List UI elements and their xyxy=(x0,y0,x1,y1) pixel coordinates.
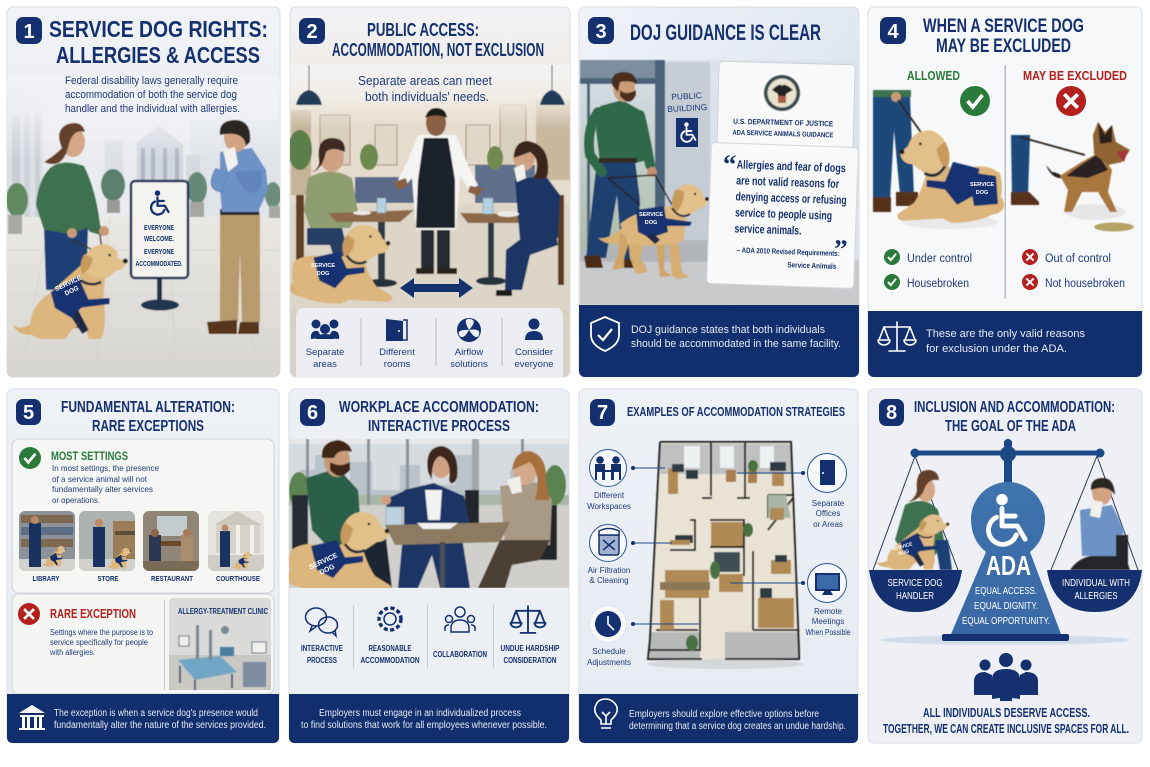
figure: handler with dog xyxy=(876,470,952,570)
list: allowed criteria xyxy=(884,249,972,290)
badge: number 1 xyxy=(16,17,42,44)
text block: separate areas xyxy=(358,73,492,104)
footer band xyxy=(579,694,858,743)
icon: group of people xyxy=(311,320,339,339)
labels: process elements: UNDUE HARDSHIP xyxy=(500,644,560,653)
text block: rare exception description xyxy=(49,628,153,657)
callout: remote meetings: When Possible xyxy=(806,628,851,637)
labels: options: solutions xyxy=(450,359,488,370)
vest label: SERVICE xyxy=(308,552,339,571)
icon: justice department seal xyxy=(764,75,800,111)
sign: everyone welcome: ACCOMMODATED. xyxy=(136,259,182,268)
badge: number 4: 4 xyxy=(887,21,899,43)
heading: panel 2 title xyxy=(332,20,544,60)
badge: number 4 xyxy=(880,17,906,44)
card: ADA quote: are not valid reasons for xyxy=(736,173,840,191)
footer band xyxy=(289,694,569,743)
sign: accessible public building: PUBLIC xyxy=(671,90,702,102)
pan: individual with allergies: INDIVIDUAL WITH xyxy=(1062,578,1130,589)
panel: 1 service dog rights xyxy=(6,7,281,377)
labels: options: everyone xyxy=(514,359,554,370)
illustration: allergy treatment clinic: ALLERGY-TREATMENT CLINIC xyxy=(178,607,268,616)
text: ADA equal access xyxy=(962,550,1050,627)
thumbnail: library xyxy=(19,511,75,571)
heading: panel 1 title xyxy=(49,16,268,68)
footer band: to find solutions that work for all employees whenever possible. xyxy=(301,720,547,731)
icon: group of people xyxy=(974,653,1038,701)
heading: panel 4 title: WHEN A SERVICE DOG xyxy=(923,16,1084,37)
card: rare exception: RARE EXCEPTION xyxy=(50,607,136,621)
badge: number 8 xyxy=(879,399,904,426)
man xyxy=(306,470,360,546)
icon: gear xyxy=(379,608,401,630)
labels: process elements: CONSIDERATION xyxy=(504,656,557,665)
text block: separate areas: Separate areas can meet xyxy=(358,73,492,88)
badge: number 2: 2 xyxy=(306,21,318,43)
footer band: The exception is when a service dog's presence would xyxy=(54,708,258,719)
labels: options: Different xyxy=(379,347,415,358)
panel: 3 DOJ guidance xyxy=(579,7,859,377)
labels: settings xyxy=(32,574,260,583)
icon: check xyxy=(960,86,990,116)
vest label: DOG xyxy=(645,220,657,226)
list: exclusion criteria: Out of control xyxy=(1045,253,1111,265)
illustration: man and service dog at public building xyxy=(579,60,859,377)
callout: schedule adjustments: Adjustments xyxy=(587,658,631,667)
icon: scales xyxy=(511,606,545,633)
pan: service dog handler: SERVICE DOG xyxy=(888,578,943,589)
pan: individual with allergies: ALLERGIES xyxy=(1074,591,1118,602)
card: ADA quote: Service Animals xyxy=(787,260,836,271)
footer band: Employers should explore effective options before xyxy=(629,709,819,720)
icon: airflow fan xyxy=(457,318,481,342)
vest label: service dog xyxy=(311,263,335,277)
illustration: lobby with handler, dog, sign and person with allergies xyxy=(6,75,281,377)
card: most settings: MOST SETTINGS xyxy=(51,451,128,463)
illustration: allergy treatment clinic xyxy=(169,598,271,690)
illustration: leg and out of control dog xyxy=(1011,122,1134,232)
column: allowed: SERVICE xyxy=(970,182,994,188)
labels: process elements: INTERACTIVE xyxy=(301,644,343,653)
vest label xyxy=(308,552,343,580)
callout: schedule adjustments: Schedule xyxy=(592,647,626,656)
callout: schedule adjustments xyxy=(587,606,700,667)
badge: number 6 xyxy=(300,399,325,426)
callout: remote meetings: Meetings xyxy=(812,617,844,626)
badge: number 7 xyxy=(590,399,615,426)
text block: most settings description: of a service animal will not xyxy=(52,475,148,484)
labels: process elements: REASONABLE xyxy=(368,644,412,653)
vest label: DOG xyxy=(319,563,337,577)
floor plan: open office xyxy=(647,442,803,669)
badge: number 8: 8 xyxy=(886,402,897,424)
callout: remote meetings: Remote xyxy=(814,607,843,616)
panel: 6 workplace accommodation xyxy=(287,389,569,743)
footer band xyxy=(7,694,279,743)
card: ADA quote: service to people using xyxy=(735,205,832,223)
text block: federal disability laws: handler and the individual with allergies. xyxy=(65,103,240,115)
text block: federal disability laws: Federal disability laws generally require xyxy=(65,75,238,87)
badge: number 5 xyxy=(16,399,41,425)
thumbnail: courthouse xyxy=(208,511,266,571)
column: may be excluded: MAY BE EXCLUDED xyxy=(1023,68,1127,83)
badge: number 2 xyxy=(299,18,325,44)
icon: x mark xyxy=(18,603,40,625)
heading: panel 5 title: RARE EXCEPTIONS xyxy=(92,418,204,435)
footer band: should be accommodated in the same facility. xyxy=(631,338,841,350)
icon: courthouse xyxy=(19,705,45,730)
card: ADA quote: denying access or refusing xyxy=(735,189,847,207)
column: allowed: DOG xyxy=(976,190,988,196)
card: rare exception xyxy=(12,594,274,694)
keyhole pillar xyxy=(951,482,1061,634)
sign: everyone welcome: WELCOME. xyxy=(144,234,174,243)
labels: process elements: COLLABORATION xyxy=(433,650,487,659)
text: ADA equal access: EQUAL DIGNITY. xyxy=(974,601,1038,612)
heading: panel 8 title xyxy=(914,399,1115,435)
figure: person with allergies xyxy=(1070,478,1130,570)
callout: different workspaces: Workspaces xyxy=(587,502,631,511)
column: allowed: ALLOWED xyxy=(907,68,960,83)
callout: separate offices: Offices xyxy=(816,509,840,518)
chart: balance scale with ADA keyhole xyxy=(869,439,1142,645)
callout: separate offices xyxy=(737,454,846,529)
arrow: separation between tables xyxy=(400,278,473,298)
column: allowed xyxy=(873,68,1004,290)
standing service dog xyxy=(598,228,625,244)
thumbnail: store xyxy=(79,511,137,571)
server xyxy=(421,228,434,268)
badge: number 3: 3 xyxy=(595,21,607,43)
heading: panel 6 title: WORKPLACE ACCOMMODATION: xyxy=(339,399,539,416)
column: may be excluded xyxy=(1011,68,1134,290)
list: exclusion criteria xyxy=(1022,249,1125,290)
card: ADA quote: Allergies and fear of dogs xyxy=(737,157,846,175)
text: ADA equal access: EQUAL ACCESS. xyxy=(975,586,1037,597)
sign: accessible public building: BUILDING xyxy=(667,102,708,114)
heading: panel 4 title: MAY BE EXCLUDED xyxy=(936,36,1071,57)
footer band: DOJ guidance states that both individuals xyxy=(631,324,825,336)
icon: light bulb xyxy=(595,699,617,728)
right table and woman xyxy=(460,213,533,223)
list: allowed criteria: Housebroken xyxy=(907,278,969,290)
badge: number 5: 5 xyxy=(23,402,34,424)
text: ADA equal access: EQUAL OPPORTUNITY. xyxy=(962,616,1050,627)
pan: service dog handler: HANDLER xyxy=(896,591,934,602)
panel: 4 when a service dog may be excluded xyxy=(868,7,1142,377)
heading: panel 6 title: INTERACTIVE PROCESS xyxy=(368,418,510,435)
vest label: service dog: SERVICE xyxy=(311,263,335,269)
card: ADA quote: – ADA 2010 Revised Requirements: xyxy=(737,245,840,258)
callout: air filtration: & Cleaning xyxy=(589,576,629,585)
vest label: SERVICE xyxy=(891,541,914,553)
icon: person xyxy=(525,318,543,340)
vest label xyxy=(639,212,663,226)
labels: process elements: PROCESS xyxy=(307,656,337,665)
text: ADA equal access: ADA xyxy=(986,550,1031,581)
callout: air filtration xyxy=(588,524,672,585)
vest label: service dog: DOG xyxy=(64,285,80,297)
footer band: Employers must engage in an individualized process xyxy=(319,708,521,719)
icon: check xyxy=(19,447,41,469)
text: closing statement xyxy=(883,706,1129,736)
labels: options xyxy=(306,347,554,370)
labels: settings: STORE xyxy=(98,574,118,583)
text block: rare exception description: Settings where the purpose is to xyxy=(50,628,153,637)
labels: options: areas xyxy=(313,359,337,370)
vest label: service dog: SERVICE xyxy=(54,274,83,293)
callout: different workspaces xyxy=(587,450,665,511)
footer band: These are the only valid reasons xyxy=(926,328,1085,340)
footer band: for exclusion under the ADA. xyxy=(926,343,1067,355)
pan: service dog handler xyxy=(869,570,962,612)
text block: separate areas: both individuals' needs. xyxy=(365,89,489,104)
heading: panel 7 title: EXAMPLES OF ACCOMMODATION STRATEGIES xyxy=(627,404,845,419)
labels: process elements: ACCOMMODATION xyxy=(360,656,420,665)
heading: panel 1 title: ALLERGIES & ACCESS xyxy=(56,42,260,68)
text block: rare exception description: with allergies. xyxy=(49,648,95,657)
manager xyxy=(404,483,470,525)
footer band xyxy=(868,311,1142,377)
callout: separate offices: Separate xyxy=(812,499,845,508)
illustration: handler legs and calm dog xyxy=(873,90,1004,229)
panel: 7 examples of accommodation strategies xyxy=(579,389,858,743)
man xyxy=(586,160,640,260)
callout: different workspaces: Different xyxy=(594,491,625,500)
callout: separate offices: or Areas xyxy=(813,520,843,529)
vest label: DOG xyxy=(898,549,910,557)
list: allowed criteria: Under control xyxy=(907,253,972,265)
callout: air filtration: Air Filtration xyxy=(588,566,630,575)
woman handler xyxy=(44,227,89,291)
card: DOJ guidance header with seal: U.S. DEPARTMENT OF JUSTICE xyxy=(733,117,833,128)
icon: shield check xyxy=(591,317,619,351)
vest label: service dog: DOG xyxy=(317,271,329,277)
sign: accessible public building xyxy=(666,90,708,147)
text block: most settings description: fundamentally alter services xyxy=(52,485,153,494)
labels: settings: COURTHOUSE xyxy=(216,574,260,583)
heading: panel 1 title: SERVICE DOG RIGHTS: xyxy=(49,16,268,42)
icon: door xyxy=(386,319,407,341)
left table and woman xyxy=(306,227,346,258)
heading: panel 5 title: FUNDAMENTAL ALTERATION: xyxy=(61,399,235,416)
text block: federal disability laws xyxy=(65,75,240,115)
vest label xyxy=(891,541,915,559)
footer band: fundamentally alter the nature of the services provided. xyxy=(54,720,266,731)
man with allergies xyxy=(220,212,260,322)
band: four accommodation options xyxy=(296,308,563,377)
panel: 5 fundamental alteration xyxy=(7,389,279,743)
card: ADA quote xyxy=(707,142,858,289)
badge: number 7: 7 xyxy=(597,402,608,424)
labels: settings: RESTAURANT xyxy=(151,574,193,583)
text block: most settings description: or operations. xyxy=(52,496,100,505)
sign: everyone welcome: EVERYONE xyxy=(144,247,174,256)
badge: number 1: 1 xyxy=(23,21,35,43)
card: DOJ guidance header with seal xyxy=(717,61,855,155)
badge: number 6: 6 xyxy=(307,402,318,424)
labels: options: Consider xyxy=(515,347,553,358)
card: ADA quote: “ xyxy=(722,149,737,179)
pan: individual with allergies xyxy=(1047,570,1142,612)
labels: options: Airflow xyxy=(455,347,483,358)
text block: rare exception description: service specifically for people xyxy=(50,638,149,647)
thumbnail: restaurant xyxy=(143,511,201,571)
icon: scales of justice xyxy=(878,322,916,351)
badge: number 3 xyxy=(588,17,614,44)
card: ADA quote: service animals. xyxy=(734,221,802,238)
text block: most settings description xyxy=(52,464,159,505)
labels: options: Separate xyxy=(306,347,344,358)
illustration: workplace meeting xyxy=(287,439,569,594)
heading: panel 6 title xyxy=(339,399,539,435)
panel: 2 public access xyxy=(288,7,570,377)
labels: process elements xyxy=(301,644,560,665)
illustration: restaurant with server and two separate tables xyxy=(288,65,570,377)
heading: panel 4 title xyxy=(923,16,1084,57)
card: ADA quote: ” xyxy=(833,234,848,264)
vest label: SERVICE xyxy=(639,212,663,218)
callout: remote meetings xyxy=(730,564,851,637)
heading: panel 2 title: PUBLIC ACCESS: xyxy=(367,20,479,40)
footer band: determining that a service dog creates an undue hardship. xyxy=(629,721,846,732)
vest label: service dog xyxy=(54,274,87,300)
labels: options: rooms xyxy=(384,359,410,370)
sign: everyone welcome: EVERYONE xyxy=(144,223,174,232)
labels: settings: LIBRARY xyxy=(32,574,60,583)
list: exclusion criteria: Not housebroken xyxy=(1045,278,1125,290)
heading: panel 3 title: DOJ GUIDANCE IS CLEAR xyxy=(630,20,821,45)
icon: people collaboration xyxy=(445,607,475,632)
heading: panel 8 title: THE GOAL OF THE ADA xyxy=(945,418,1076,435)
text block: most settings description: In most settings, the presence xyxy=(52,464,159,473)
heading: panel 5 title xyxy=(61,399,235,435)
card: DOJ guidance header with seal: ADA SERVICE ANIMALS GUIDANCE xyxy=(732,130,834,139)
icon: x mark xyxy=(1056,86,1086,116)
text: closing statement: ALL INDIVIDUALS DESERVE ACCESS. xyxy=(923,706,1090,720)
text block: federal disability laws: accommodation of both the service dog xyxy=(65,89,237,101)
woman with allergies xyxy=(500,482,552,545)
heading: panel 2 title: ACCOMMODATION, NOT EXCLUSION xyxy=(332,40,544,60)
sign: everyone welcome xyxy=(136,190,182,268)
footer band xyxy=(579,305,859,377)
card: most settings xyxy=(12,439,274,593)
icon: speech bubbles xyxy=(306,608,338,636)
panel: 8 inclusion and accommodation xyxy=(868,389,1142,743)
